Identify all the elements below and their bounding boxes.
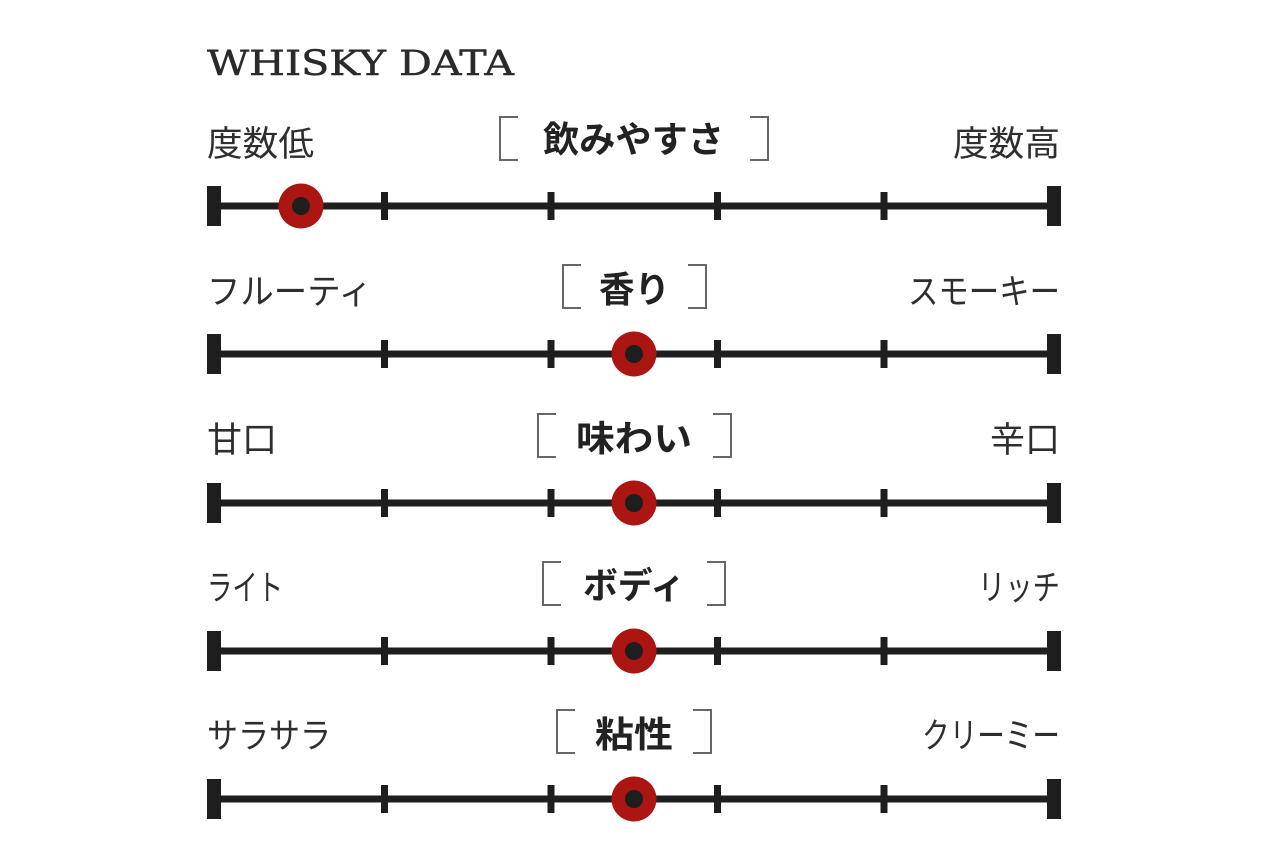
scale: [207, 334, 1061, 374]
row: 香り: [207, 265, 1061, 376]
right label: スモーキー: [908, 273, 1060, 312]
marker: [612, 332, 656, 376]
scale: [207, 186, 1061, 226]
left label: 度数低: [207, 125, 314, 164]
right label: 辛口: [990, 421, 1060, 460]
row: 粘性: [207, 710, 1061, 822]
marker: [612, 776, 656, 822]
right bracket: [713, 414, 731, 457]
right bracket: [688, 265, 706, 308]
right label: クリーミー: [922, 717, 1060, 756]
left bracket: [500, 117, 518, 160]
right bracket: [707, 562, 725, 605]
right label: 度数高: [953, 125, 1060, 164]
right bracket: [693, 710, 711, 753]
heading: 香り: [599, 269, 670, 310]
left bracket: [563, 265, 581, 308]
left label: ライト: [207, 569, 283, 608]
scale: [207, 779, 1061, 819]
right bracket: [750, 117, 768, 160]
row: 味わい: [207, 414, 1061, 526]
marker: [612, 628, 656, 674]
left bracket: [557, 710, 575, 753]
row: 飲みやすさ: [207, 117, 1061, 228]
heading: 味わい: [576, 418, 692, 459]
heading: 粘性: [595, 714, 673, 755]
scale: [207, 483, 1061, 523]
left label: サラサラ: [207, 717, 331, 756]
marker: [278, 184, 324, 228]
heading: ボディ: [583, 565, 685, 606]
left label: フルーティ: [207, 273, 372, 312]
right label: リッチ: [978, 569, 1060, 608]
marker: [612, 480, 656, 526]
left bracket: [538, 414, 556, 457]
row: ボディ: [207, 562, 1061, 674]
left bracket: [543, 562, 561, 605]
heading: 飲みやすさ: [543, 119, 724, 160]
left label: 甘口: [207, 421, 277, 460]
scale: [207, 631, 1061, 671]
title: WHISKY DATA: [207, 44, 515, 84]
